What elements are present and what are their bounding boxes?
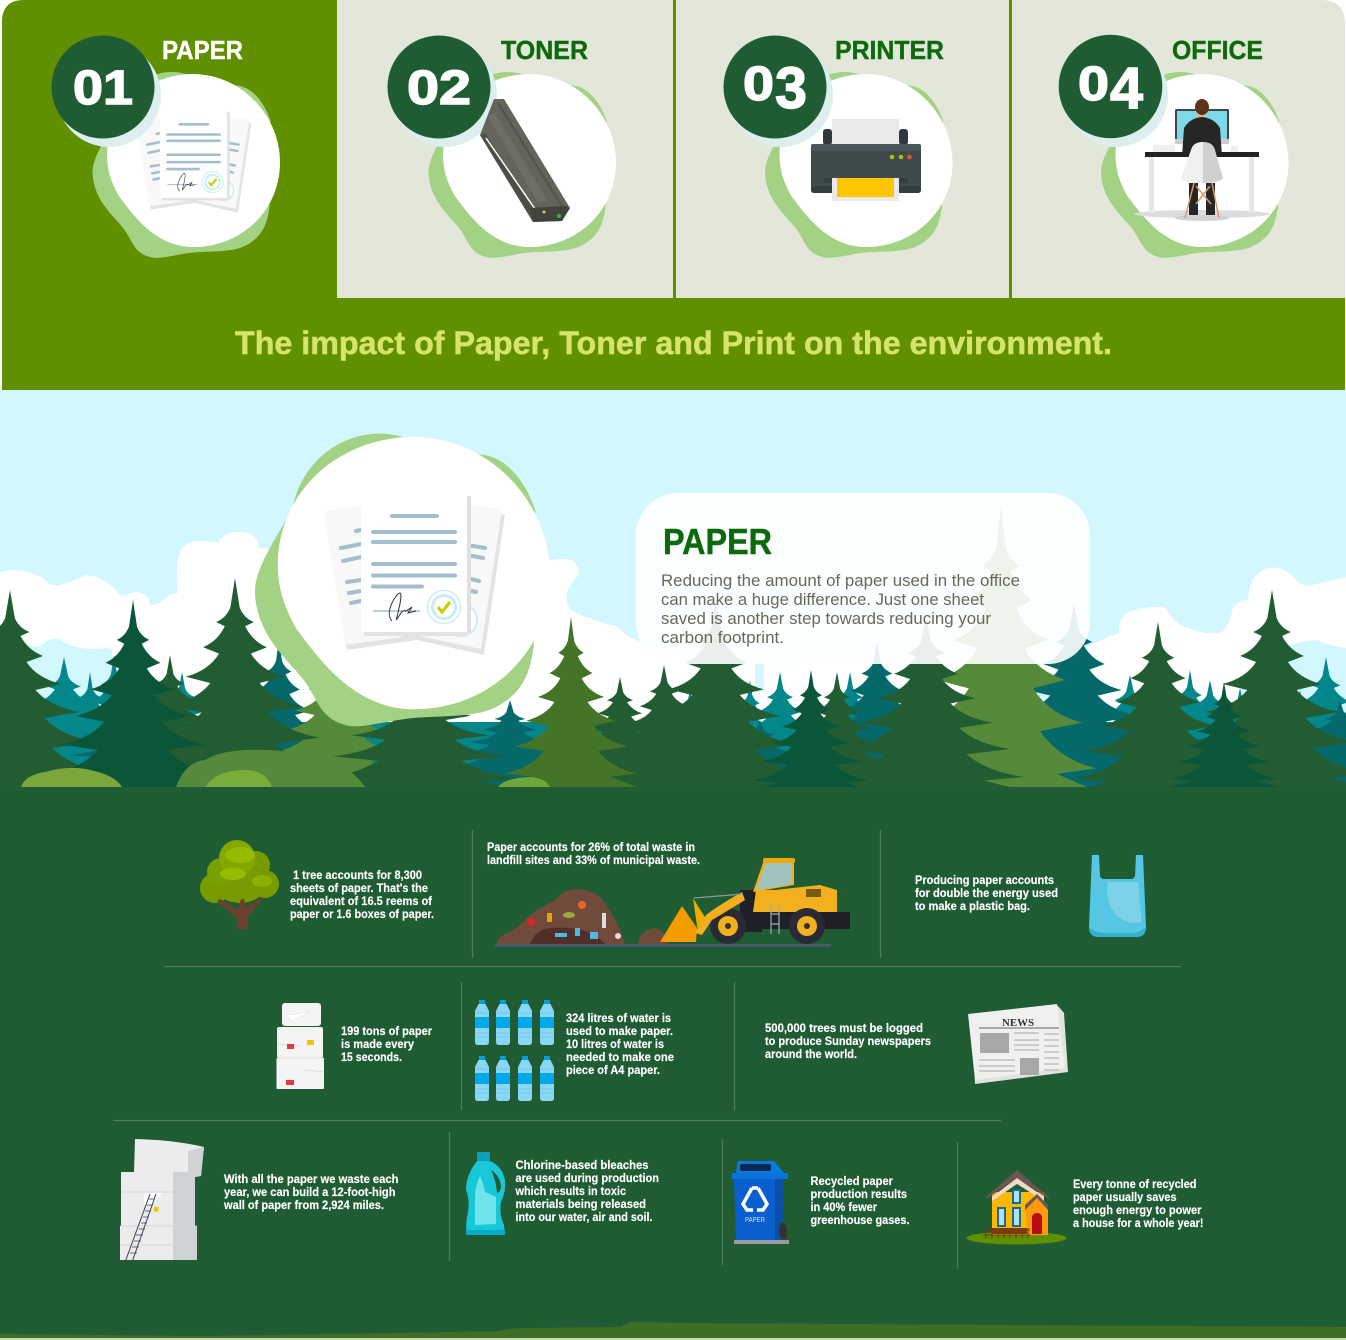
heading: printer: PRINTER [835,35,944,65]
text [810,1176,910,1227]
panel dividers [674,0,1010,298]
bottom edge [0,1338,1346,1340]
text: equivalent of 16.5 reems of [290,896,432,908]
bushes [21,750,550,787]
panel: 01 paper [52,35,280,258]
text: wall of paper from 2,924 miles. [223,1200,384,1212]
text: production results [810,1189,907,1201]
fact: newspapers [765,1004,1068,1084]
icon blob: paper [92,72,280,258]
text: 10 litres of water is [566,1039,664,1051]
text: 1 tree accounts for 8,300 [293,870,422,882]
panel background [636,493,1090,664]
icon: newspaper: NEWS [1002,1018,1034,1029]
text: is made every [341,1039,415,1051]
title band [2,298,1345,390]
text: 500,000 trees must be logged [765,1023,923,1035]
icon blob: office [1101,72,1288,258]
text: a house for a whole year! [1073,1218,1204,1230]
fact: bleach [466,1152,659,1235]
darker spruces [48,600,1278,790]
section dividers [113,830,1181,1269]
fact: wall of paper [120,1139,398,1265]
icon: house [966,1170,1066,1244]
feature blob: paper documents [255,434,550,726]
body text [661,571,1020,647]
text [223,1174,398,1212]
text: sheets of paper. That's the [290,883,428,895]
body text: can make a huge difference. Just one sheet [661,590,984,609]
text: to make a plastic bag. [915,901,1030,913]
olive spruce [505,617,637,787]
text: Paper accounts for 26% of total waste in [487,842,695,854]
translucent info panel [636,493,1090,664]
number badge 02: 02 [407,62,471,115]
body text: saved is another step towards reducing your [661,609,991,628]
text: into our water, air and soil. [516,1212,652,1224]
sky background [0,390,1346,790]
text: Chlorine-based bleaches [516,1160,648,1172]
icon: newspaper [968,1004,1068,1084]
number badge 03: 0 [743,58,774,111]
icon: water bottles [475,1000,554,1101]
text [487,842,700,867]
fact: recycling [732,1161,910,1244]
body text: carbon footprint. [661,628,784,647]
fact: landfill [487,842,850,946]
text [765,1023,931,1061]
text: paper or 1.6 boxes of paper. [290,909,434,921]
number badge 03 [724,36,833,147]
heading: office: OFFICE [1172,35,1263,65]
text: landfill sites and 33% of municipal waste. [487,855,700,867]
forest [0,506,1346,797]
sky gaps below the clouds [755,664,1058,712]
text: With all the paper we waste each [224,1174,398,1186]
icon blob: printer [765,72,952,258]
fact: water use [475,1000,674,1101]
back row: teal trees [0,655,1346,797]
text [1073,1179,1204,1230]
text: materials being released [516,1199,646,1211]
text [290,870,434,921]
clouds [0,532,1346,740]
ground strip [0,1322,1346,1338]
fact: paper tonnage [276,1003,433,1089]
top header background [2,0,337,298]
text: 324 litres of water is [566,1013,671,1025]
text: which results in toxic [515,1186,627,1198]
text: Every tonne of recycled [1073,1179,1196,1191]
fact: plastic bag [915,855,1146,937]
icon: paper stack [276,1003,324,1089]
title: The impact of Paper, Toner and Print on the environment. [235,325,1112,361]
text: Recycled paper [810,1176,894,1188]
icon: paper wall with ladder [120,1139,204,1265]
text [515,1160,659,1224]
icon: bleach bottle [466,1152,505,1235]
panel: 02 toner [388,35,616,258]
icon: plastic bag [1089,855,1146,937]
panel: toner background [337,0,673,298]
illustration: waste pile and loader [495,858,850,946]
text: greenhouse gases. [810,1215,910,1227]
text: needed to make one [566,1052,674,1064]
text [915,875,1058,913]
panel: 04 office [1059,35,1288,258]
icon: printer [811,119,921,201]
fact: energy saved [966,1170,1204,1244]
heading: paper: PAPER [663,521,772,562]
number badge 01: 01 [73,62,133,115]
light green feature trees [253,506,1096,791]
panel: 03 printer [724,35,952,258]
text: enough energy to power [1073,1205,1202,1217]
heading: paper: PAPER [162,35,243,65]
number badge 04: 0 [1078,58,1109,111]
number badge 04 [1059,35,1168,147]
text: for double the energy used [915,888,1058,900]
text [566,1013,674,1077]
text: 15 seconds. [341,1052,402,1064]
number badge 01 [52,36,161,147]
text: 199 tons of paper [341,1026,433,1038]
heading: toner: TONER [501,35,588,65]
body text: Reducing the amount of paper used in the office [661,571,1020,590]
dark green facts section [0,787,1346,1340]
text: are used during production [516,1173,659,1185]
text: year, we can build a 12-foot-high [224,1187,396,1199]
number badge 02 [388,36,497,147]
middle row: dark teal trees [42,603,1346,790]
number badge 03: 3 [775,56,807,121]
text: used to make paper. [566,1026,673,1038]
front row: dark green spruces [0,578,1346,792]
text [341,1026,433,1064]
text: to produce Sunday newspapers [765,1036,931,1048]
text: in 40% fewer [810,1202,877,1214]
panel: office background [1012,0,1345,298]
panel: printer background [676,0,1009,298]
icon: office worker at desk [1134,99,1270,221]
text: around the world. [765,1049,857,1061]
text: paper usually saves [1073,1192,1176,1204]
text: piece of A4 paper. [566,1065,660,1077]
number badge 04: 4 [1110,56,1143,121]
icon: toner cartridge [480,99,570,222]
fact: tree [200,840,434,929]
text: Producing paper accounts [915,875,1054,887]
icon blob: toner [428,72,616,258]
icon: recycling bin [732,1161,789,1244]
icon: tree [200,840,279,929]
icon: paper documents [136,112,251,213]
icon: recycling bin: PAPER [745,1215,765,1224]
